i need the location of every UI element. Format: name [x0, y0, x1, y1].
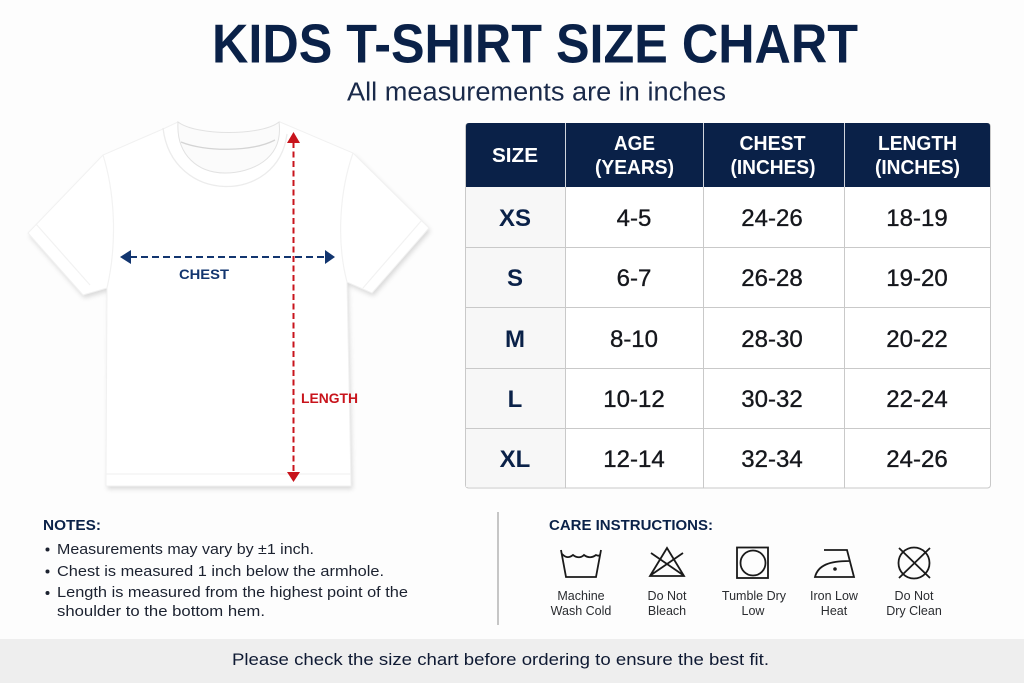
icon: tumble dry low: Tumble Dry — [722, 589, 787, 603]
table grid — [466, 187, 990, 488]
row XS: XS — [499, 205, 531, 232]
table header: (INCHES) — [730, 157, 816, 179]
neck opening — [178, 122, 279, 173]
footer bar — [0, 639, 1024, 683]
icon: iron low heat: Iron Low — [810, 589, 859, 603]
t-shirt diagram — [28, 122, 430, 489]
icon: iron low heat — [810, 550, 859, 618]
row XS — [499, 205, 948, 232]
back neck seam — [181, 140, 275, 149]
icon: tumble dry low — [722, 548, 787, 618]
row M: 28-30 — [741, 326, 803, 353]
icon: machine wash cold: Machine — [557, 589, 605, 603]
notes list: shoulder to the bottom hem. — [57, 604, 265, 620]
table header: CHEST — [740, 133, 806, 155]
size table — [466, 123, 990, 488]
icon: do not dry clean: Dry Clean — [886, 604, 942, 618]
table header: LENGTH — [878, 133, 957, 155]
chest arrow — [120, 250, 335, 264]
row S: 19-20 — [886, 265, 948, 292]
title: KIDS T-SHIRT SIZE CHART — [212, 12, 858, 74]
shirt shadow — [30, 156, 430, 489]
table header: AGE — [614, 133, 655, 155]
row S: S — [507, 265, 523, 292]
notes list: Length is measured from the highest point of the — [57, 585, 408, 601]
icon: machine wash cold — [551, 550, 611, 618]
icon: tumble dry low: Low — [742, 604, 765, 618]
row XL: 12-14 — [603, 446, 665, 473]
row M: 20-22 — [886, 326, 948, 353]
length label: LENGTH — [301, 390, 358, 406]
table background — [466, 124, 990, 488]
table header — [466, 123, 990, 187]
row L — [508, 386, 948, 413]
chest label: CHEST — [179, 266, 229, 282]
shirt body — [28, 122, 429, 486]
row L: 10-12 — [603, 386, 665, 413]
row M — [505, 326, 948, 353]
row S: 26-28 — [741, 265, 803, 292]
icon: machine wash cold: Wash Cold — [551, 604, 611, 618]
icon: do not bleach: Bleach — [648, 604, 686, 618]
icon: do not dry clean — [886, 548, 942, 618]
row XL: 32-34 — [741, 446, 803, 473]
notes list — [46, 542, 408, 620]
row XL: 24-26 — [886, 446, 948, 473]
size column tint — [466, 187, 565, 487]
icon: do not bleach: Do Not — [648, 589, 687, 603]
length arrow — [287, 132, 300, 482]
row XS: 18-19 — [886, 205, 948, 232]
row M: M — [505, 326, 525, 353]
row L: 30-32 — [741, 386, 803, 413]
footer bar: Please check the size chart before ordering to ensure the best fit. — [232, 650, 769, 669]
row XS: 4-5 — [617, 205, 651, 232]
row L: L — [508, 386, 522, 413]
icon: do not bleach — [648, 548, 687, 618]
care heading: CARE INSTRUCTIONS: — [549, 518, 713, 534]
icon: iron low heat: Heat — [821, 604, 848, 618]
row XL: XL — [500, 446, 530, 473]
row S: 6-7 — [617, 265, 651, 292]
notes list: Chest is measured 1 inch below the armhole. — [57, 564, 384, 580]
notes — [43, 518, 408, 620]
notes list: Measurements may vary by ±1 inch. — [57, 542, 314, 558]
table header: SIZE — [492, 145, 538, 167]
row XS: 24-26 — [741, 205, 803, 232]
care instructions — [549, 518, 942, 618]
subtitle: All measurements are in inches — [347, 78, 726, 106]
icon: do not dry clean: Do Not — [895, 589, 934, 603]
row S — [507, 265, 948, 292]
row XL — [500, 446, 948, 473]
table header: (YEARS) — [595, 157, 674, 179]
row M: 8-10 — [610, 326, 658, 353]
collar — [163, 128, 287, 187]
notes heading: NOTES: — [43, 518, 101, 534]
sleeve seams — [36, 153, 422, 474]
table header: (INCHES) — [875, 157, 960, 179]
row L: 22-24 — [886, 386, 948, 413]
